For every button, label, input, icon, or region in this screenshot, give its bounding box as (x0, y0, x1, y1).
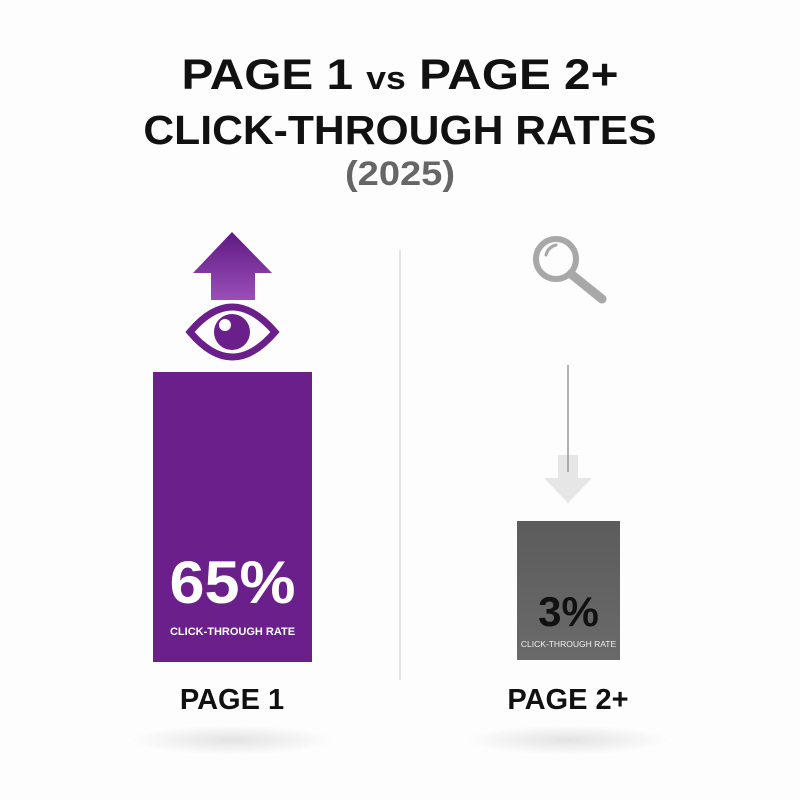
divider (399, 250, 401, 680)
bar label: CLICK-THROUGH RATE (521, 639, 616, 649)
icon: magnifier (533, 236, 606, 304)
label page 1: PAGE 1 (180, 684, 284, 716)
bar label: CLICK-THROUGH RATE (170, 626, 295, 638)
value 65%: 65% (169, 549, 296, 616)
label page 2+: PAGE 2+ (507, 684, 629, 716)
title line 1: PAGE 1 vs PAGE 2+ (182, 51, 618, 99)
bar: page 1 (153, 372, 312, 662)
year: (2025) (345, 155, 455, 193)
icon: up arrow with eye (186, 232, 280, 360)
value 3%: 3% (538, 588, 599, 635)
title (143, 51, 657, 193)
bar: page 2+ (517, 521, 620, 660)
title line 2: CLICK-THROUGH RATES (143, 107, 657, 153)
shadows (130, 725, 335, 755)
arrow: down (544, 365, 592, 503)
